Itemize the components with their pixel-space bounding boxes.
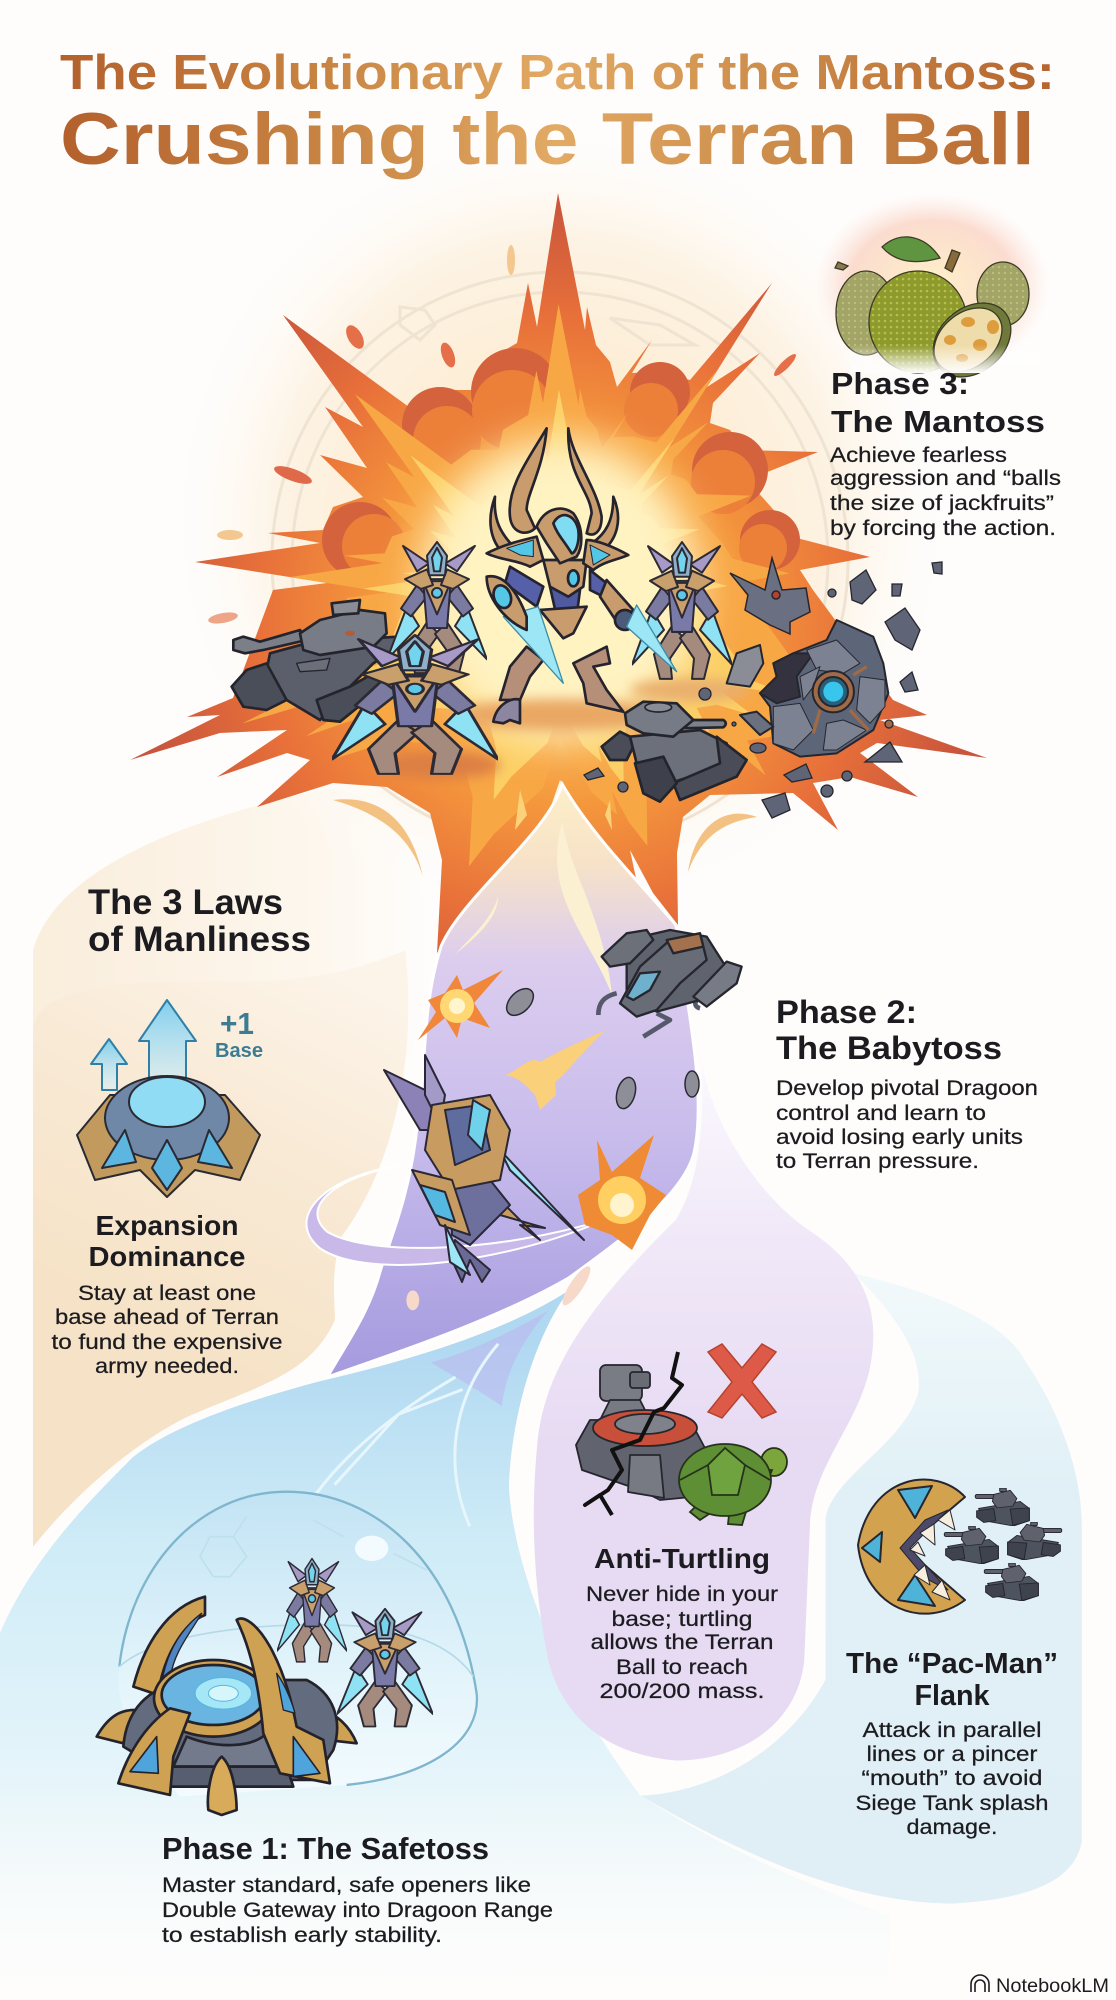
river sparks [406,1265,595,1310]
panel: laws inner [33,950,408,1547]
icon: explosion upper [418,970,503,1040]
notebooklm logo: NotebookLM [996,1976,1109,1997]
icon: nexus base [97,1597,357,1815]
stem side swooshes [333,799,757,877]
icon: turtle [679,1444,787,1525]
text block: anti-turtling: Never hide in your [586,1583,778,1606]
text block: expansion dominance: Dominance [88,1241,246,1272]
text block: phase 1: to establish early stability. [162,1924,442,1947]
text block: pac-man flank: Flank [914,1680,990,1712]
river pale streaks [455,821,612,996]
panel: pac-man blue [641,1273,1082,1904]
text block: phase 3: The Mantoss [831,404,1045,439]
unit: front zealot [332,635,498,774]
text block: pac-man flank: damage. [906,1816,998,1839]
text block: phase 3 [830,366,1061,540]
text block: phase 2: avoid losing early units [776,1126,1023,1149]
river and stem flow [306,784,698,1377]
text block: anti-turtling [586,1543,778,1703]
text block: pac-man flank [846,1648,1058,1839]
text block: pac-man flank: Attack in parallel [862,1719,1042,1742]
unit: dragoon in flight [384,1055,584,1282]
text block: anti-turtling: 200/200 mass. [600,1680,764,1703]
text block: phase 2: control and learn to [776,1102,986,1125]
text block: phase 1: Phase 1: The Safetoss [162,1831,489,1866]
icon: tiny tanks [944,1488,1062,1601]
rune rings and halo [160,120,960,920]
text block: pac-man flank: lines or a pincer [866,1743,1038,1766]
icon: jackfruits [814,193,1050,392]
panel: phase 1 blue wash [0,1290,890,2000]
text block: anti-turtling: Anti-Turtling [594,1543,770,1574]
title: Crushing the Terran Ball [60,99,1035,180]
stem highlights [515,790,612,830]
text block: pac-man flank: Siege Tank splash [856,1792,1048,1815]
title: The Evolutionary Path of the Mantoss: [60,46,1055,100]
unit: dome dragoon [337,1609,433,1726]
text block: anti-turtling: Ball to reach [616,1656,748,1679]
icon: red x [708,1344,776,1418]
icon: left siege tank [232,600,403,722]
text block: phase 3: the size of jackfruits” [830,492,1054,515]
text block: phase 2: to Terran pressure. [776,1150,979,1173]
text block: phase 3: Achieve fearless [830,444,1007,467]
icon: pac-man pincer [858,1480,965,1614]
text block: phase 1: Double Gateway into Dragoon Range [162,1899,553,1922]
text block: phase 3: by forcing the action. [830,517,1056,540]
icon: crack [585,1352,682,1515]
yellow burst [328,389,791,800]
text block: expansion dominance: Stay at least one [78,1282,256,1305]
unit: back right zealot [632,542,732,679]
text block: phase 1: Master standard, safe openers like [162,1874,531,1897]
violet river [327,784,698,1377]
explosion [130,193,987,953]
icon: expansion base with arrows [77,1000,260,1197]
icon: terran dropship [598,930,742,1037]
ground scorch [380,678,750,779]
embers [207,245,798,626]
amber burst [242,304,876,866]
text block: the 3 laws heading [88,883,311,959]
text block: expansion dominance [52,1210,282,1378]
blue circuit streaks [299,1344,498,1526]
icon: explosion lower [578,1135,666,1250]
text block: expansion dominance: to fund the expensive [52,1331,282,1354]
white-hot core [420,440,700,740]
text block: anti-turtling: base; turtling [612,1608,752,1631]
unit: central hero [487,428,677,723]
background flow shapes [0,1049,1082,2000]
text block: the 3 laws heading: The 3 Laws [88,883,283,922]
text block: phase 3: aggression and “balls [830,467,1061,490]
icon: right siege tank [602,702,747,802]
icon: bullets [502,984,699,1111]
text block: expansion dominance: base ahead of Terran [55,1306,279,1329]
title [60,46,1055,180]
text block: phase 2: Develop pivotal Dragoon [776,1077,1038,1100]
text block: expansion dominance: Expansion [96,1210,238,1241]
label: +1 base [215,1006,263,1062]
icon: cracked bunker [576,1365,712,1500]
text block: phase 2: Phase 2: [776,994,917,1030]
text block: expansion dominance: army needed. [95,1355,239,1378]
dark cloud puffs [322,348,800,578]
text block: anti-turtling: allows the Terran [590,1631,774,1654]
orange cloud puffs [342,370,787,578]
rocks and debris [584,562,942,818]
icon: destroyed terran ball [727,620,888,757]
panel: laws outer wash [33,788,430,1060]
outer spikes [130,193,987,953]
violet tint in blue flow [431,1311,548,1406]
unit: dome zealot [277,1559,347,1662]
text block: phase 3: Phase 3: [831,366,969,401]
panel: anti-turtling [534,1049,873,1761]
river swirl [306,1166,605,1265]
text block: phase 1 [162,1831,553,1947]
text block: pac-man flank: “mouth” to avoid [862,1767,1042,1790]
icon: flame trails [505,1030,605,1110]
text block: pac-man flank: The “Pac-Man” [846,1648,1058,1680]
icon: wrecked flyer [730,558,810,634]
unit: back left zealot [387,542,487,673]
text block: the 3 laws heading: of Manliness [88,920,311,959]
icon: shield dome [118,1492,477,1797]
text block: phase 2 [776,994,1038,1173]
label: +1 base: +1 [220,1006,254,1041]
label: +1 base: Base [215,1040,263,1062]
text block: phase 2: The Babytoss [776,1030,1002,1066]
